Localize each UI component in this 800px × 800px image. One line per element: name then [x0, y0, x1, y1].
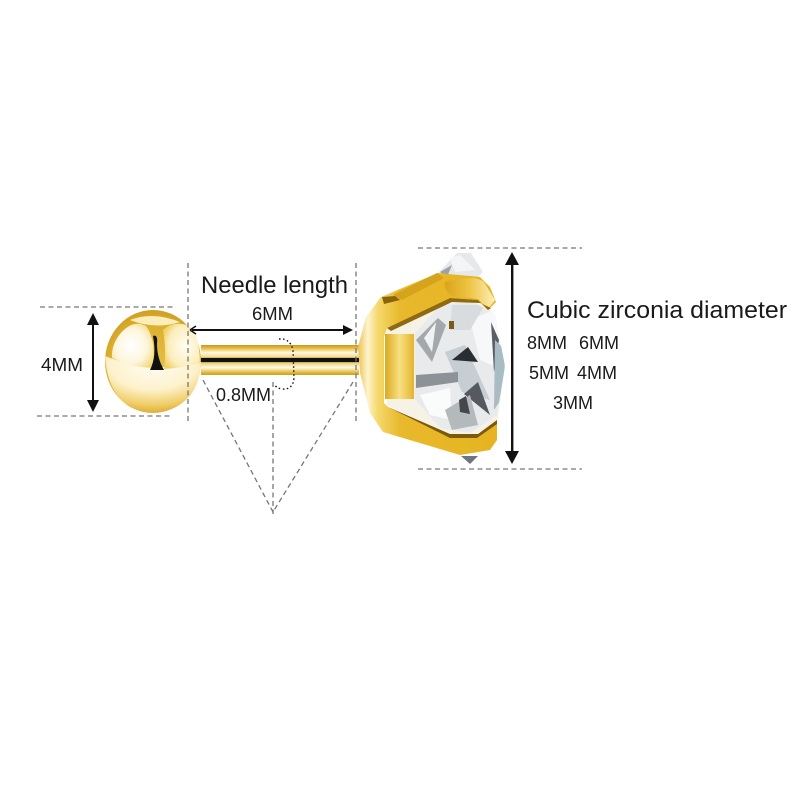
label: needle length: Needle length	[201, 272, 348, 299]
label: sizes row 3: 3MM	[553, 393, 593, 413]
label: sizes row 2: 5MM	[529, 363, 569, 383]
label: 0.8MM: 0.8MM	[216, 385, 271, 405]
needle gauge dotted loop	[274, 339, 294, 389]
arrow: stone diameter	[505, 252, 519, 464]
gold prong setting	[358, 273, 497, 455]
label: sizes row 2: 4MM	[577, 363, 617, 383]
gemstone	[386, 253, 505, 464]
label: cubic zirconia diameter: Cubic zirconia diameter	[527, 297, 787, 324]
label: sizes row 1: 6MM	[579, 333, 619, 353]
dimension guide lines	[37, 248, 582, 514]
arrow: ball diameter	[87, 313, 99, 412]
label: sizes row 1: 8MM	[527, 333, 567, 353]
needle bar	[201, 345, 359, 375]
ball end of the earring	[105, 310, 201, 413]
arrow: needle length	[190, 325, 353, 335]
label: 6MM: 6MM	[252, 304, 293, 324]
label: 4MM: 4MM	[41, 355, 83, 375]
infographic: stud earring dimensions	[37, 247, 787, 514]
